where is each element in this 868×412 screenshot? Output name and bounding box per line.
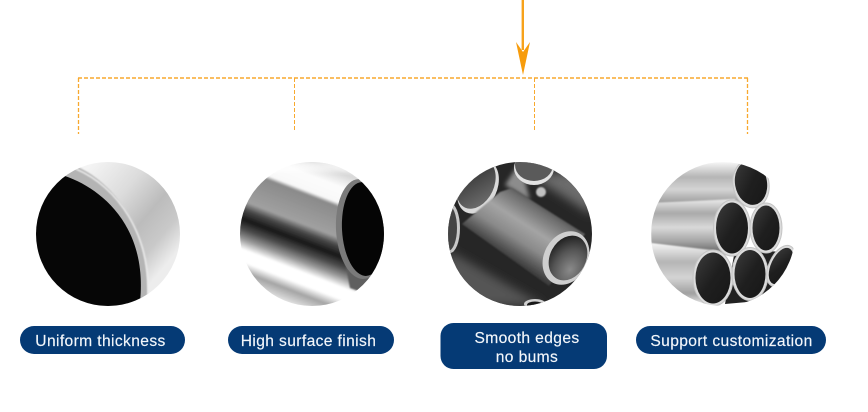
label: high surface finish <box>228 326 394 354</box>
arrow: orange down arrow <box>516 0 530 75</box>
photo: stacked steel pipes <box>651 157 801 306</box>
label: high surface finish: High surface finish <box>241 333 376 350</box>
label: uniform thickness: Uniform thickness <box>35 333 166 350</box>
photo: high surface finish tube <box>240 162 384 306</box>
label: support customization <box>636 326 826 354</box>
label: smooth edges no burrs: Smooth edges <box>474 330 580 347</box>
connector: dashed orange branch lines <box>78 78 748 134</box>
label: uniform thickness <box>20 326 185 354</box>
label: support customization: Support customization <box>650 333 813 350</box>
photo: uniform thickness pipe end <box>30 162 180 312</box>
label: smooth edges no burrs: no bums <box>496 349 558 366</box>
label: smooth edges no burrs <box>440 323 607 369</box>
photo: smooth edges tube bundle <box>448 162 592 306</box>
